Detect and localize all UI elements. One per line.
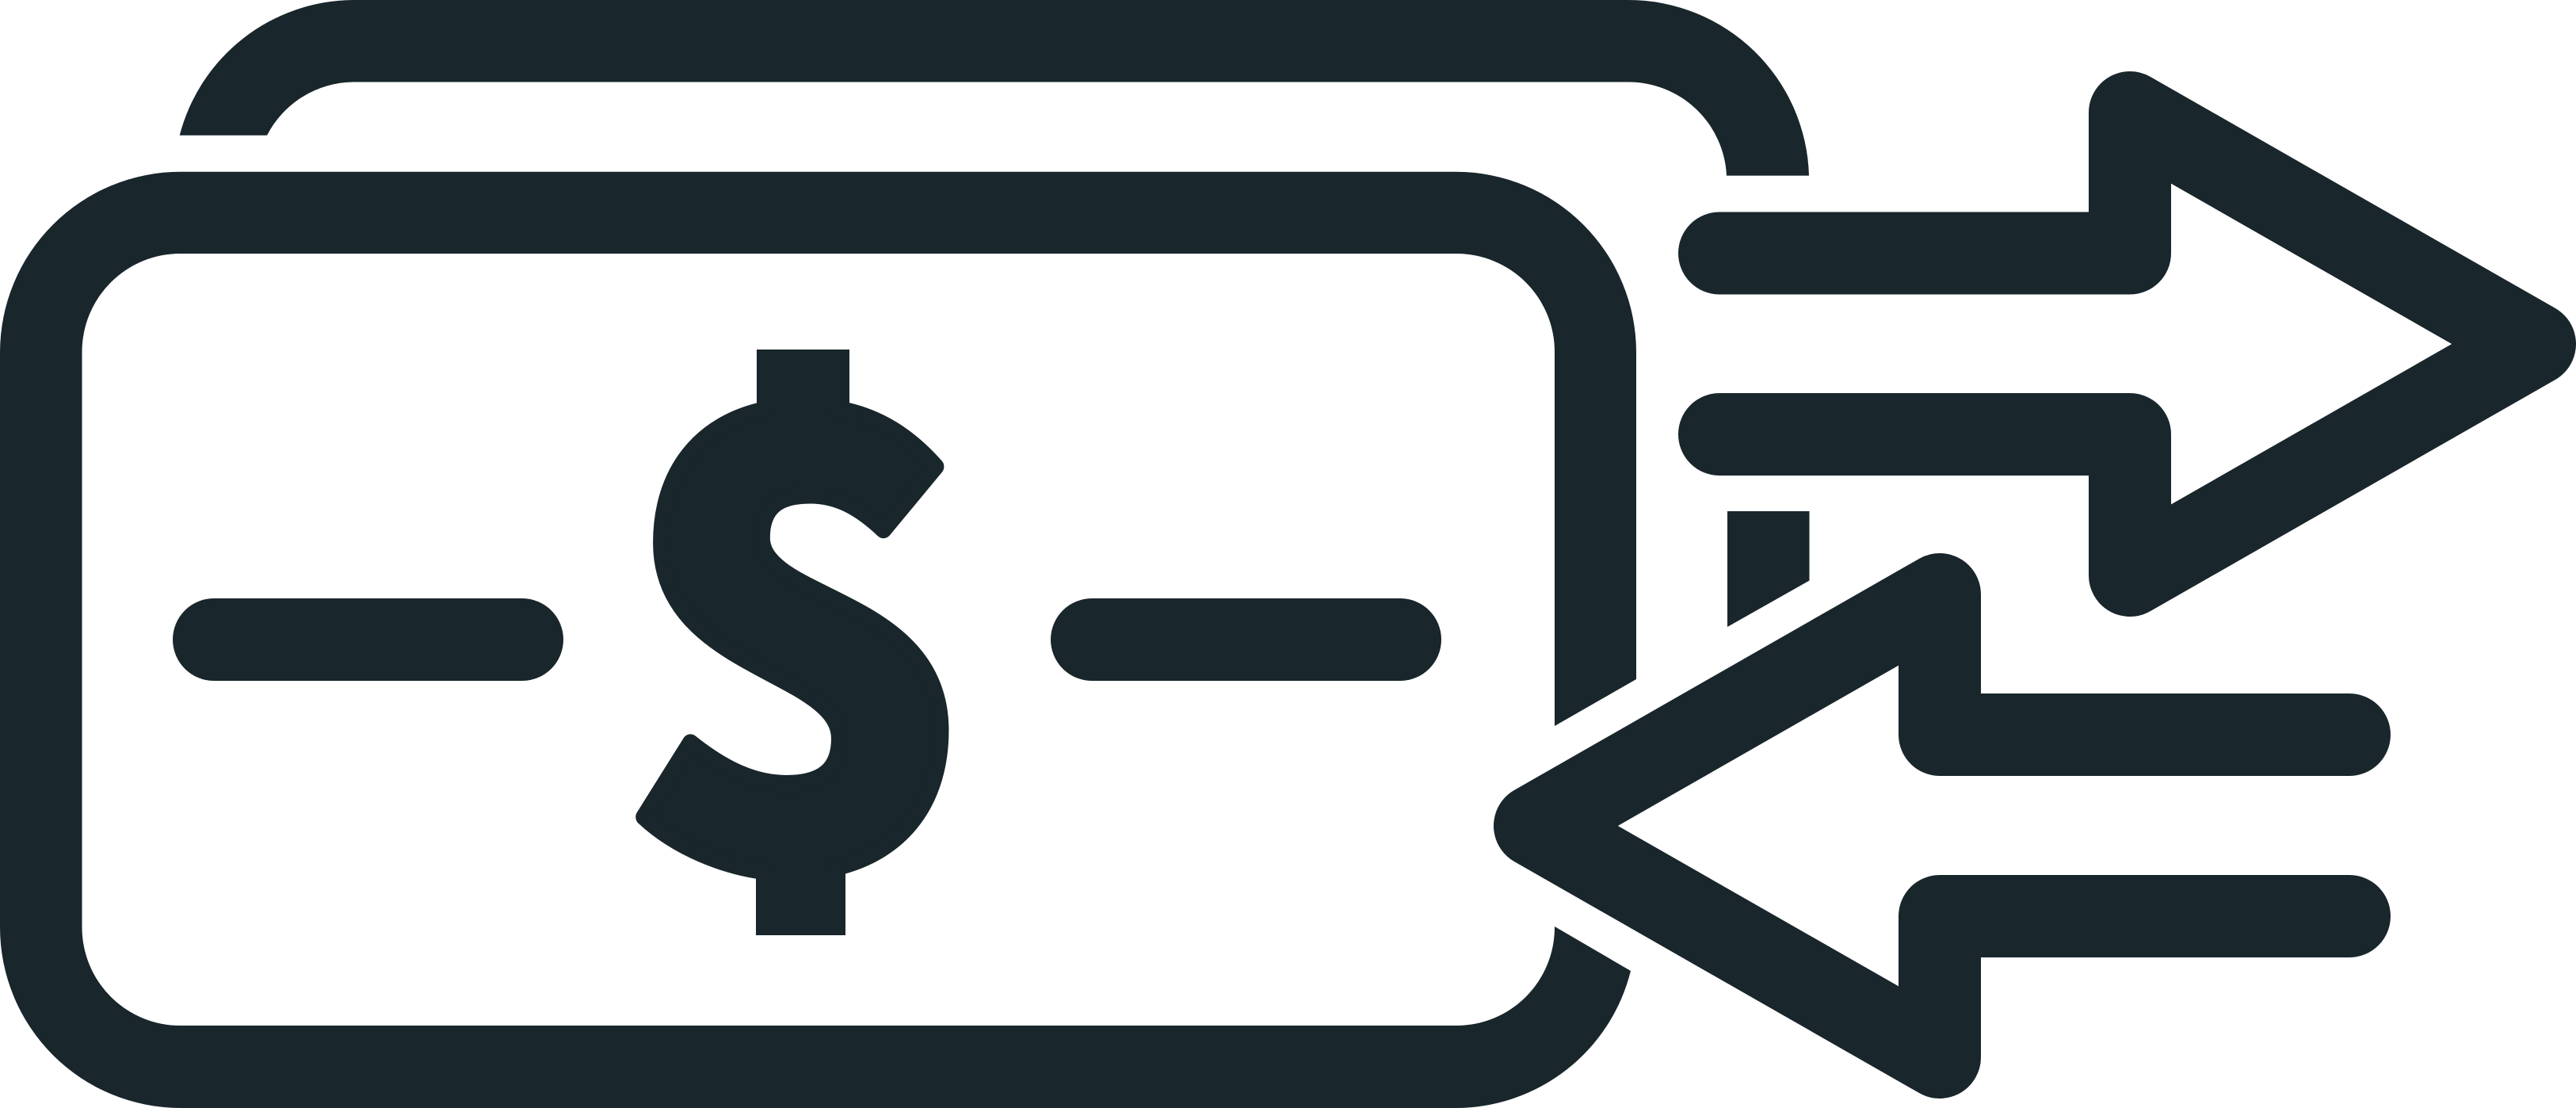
dollar sign: $ [619,147,982,1042]
left dash on banknote [173,598,563,681]
front banknote outline [0,172,1636,1108]
small square fragment [1727,511,1810,627]
arrow pointing right [1719,113,2535,575]
dollar sign [635,350,949,935]
back banknote outline [180,0,1809,176]
right dash on banknote [1051,598,1441,681]
arrow pointing left [1535,594,2349,1057]
